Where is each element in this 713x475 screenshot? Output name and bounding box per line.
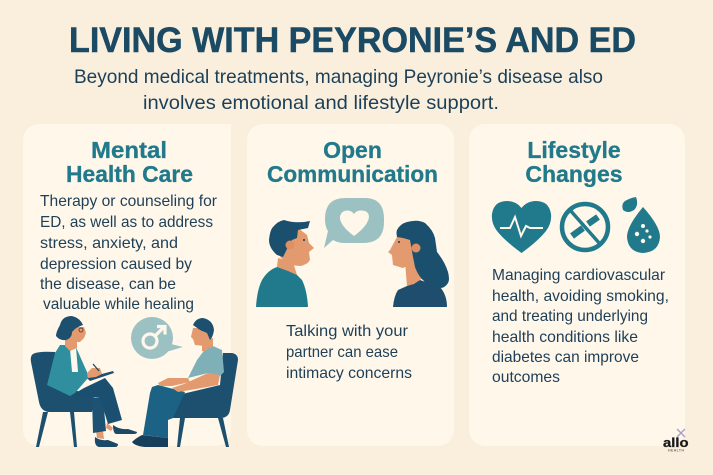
therapist chair	[31, 352, 95, 447]
text: open communication: intimacy concerns	[286, 365, 412, 382]
heading: lifestyle changes	[525, 137, 623, 187]
heading: mental health care	[66, 137, 193, 187]
panel: lifestyle changes	[469, 124, 685, 446]
therapist	[47, 316, 137, 447]
heading: open communication: Open	[323, 137, 382, 163]
heading: open communication	[267, 137, 438, 187]
text: mental health care: valuable while healing	[43, 296, 194, 313]
heading: open communication: Communication	[267, 161, 438, 187]
subtitle: involves emotional and lifestyle support.	[143, 92, 499, 114]
text: open communication: partner can ease	[286, 344, 398, 361]
text: open communication	[286, 323, 412, 382]
heading: lifestyle changes: Changes	[525, 161, 623, 187]
text: lifestyle changes: and treating underlying	[492, 308, 648, 325]
icon: no smoking	[562, 204, 608, 250]
title: LIVING WITH PEYRONIE’S AND ED	[69, 21, 636, 60]
illustration: woman in profile	[388, 221, 449, 307]
panel: open communication	[247, 124, 454, 446]
illustration: man in profile	[256, 220, 314, 307]
logo: allo health: allo	[663, 435, 689, 450]
patient	[132, 318, 224, 447]
heading: lifestyle changes: Lifestyle	[527, 137, 621, 163]
text: mental health care: depression caused by	[40, 256, 192, 273]
text: mental health care: Therapy or counseling for	[40, 193, 217, 210]
text: lifestyle changes	[492, 267, 669, 386]
icon: water drops	[622, 197, 660, 253]
text: lifestyle changes: Managing cardiovascular	[492, 267, 665, 284]
panel: mental health care	[23, 124, 238, 447]
text: lifestyle changes: health, avoiding smoking,	[492, 288, 669, 305]
heading: mental health care: Health Care	[66, 161, 193, 187]
heading: mental health care: Mental	[91, 137, 167, 163]
speech bubble: heart	[324, 198, 384, 248]
text: mental health care: the disease, can be	[40, 276, 176, 293]
subtitle: Beyond medical treatments, managing Peyronie’s disease also	[74, 66, 603, 88]
text: lifestyle changes: diabetes can improve	[492, 349, 639, 366]
subtitle	[74, 66, 603, 114]
text: lifestyle changes: outcomes	[492, 369, 560, 386]
speech bubble: male symbol	[131, 317, 183, 359]
patient chair	[172, 353, 238, 447]
logo: allo health: HEALTH	[668, 448, 684, 452]
illustration: therapist and patient	[31, 316, 238, 447]
text: open communication: Talking with your	[286, 323, 408, 340]
text: lifestyle changes: health conditions like	[492, 329, 638, 346]
text: mental health care	[40, 193, 217, 313]
text: mental health care: ED, as well as to address	[40, 214, 213, 231]
text: mental health care: stress, anxiety, and	[40, 235, 178, 252]
logo: allo health	[663, 429, 689, 452]
icon: heart with pulse	[492, 201, 551, 253]
